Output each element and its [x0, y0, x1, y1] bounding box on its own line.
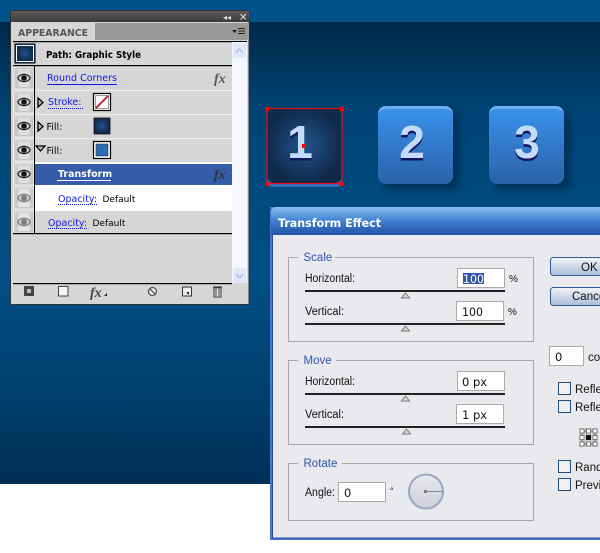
group: scale: Scale	[304, 252, 332, 264]
button 2: 2	[399, 116, 425, 168]
button 1: selected	[265, 107, 344, 187]
group: rotate: °	[390, 486, 394, 496]
icon: reference point locator	[579, 428, 598, 447]
dialog: transform effect	[270, 207, 600, 540]
button 2	[378, 106, 459, 190]
group: move: 0 px	[462, 375, 487, 389]
group: scale	[288, 252, 534, 342]
row: round corners: fx	[214, 72, 226, 87]
copies field	[550, 346, 600, 366]
row: opacity	[13, 211, 232, 234]
panel title bar	[11, 11, 249, 24]
dialog title bar: Transform Effect	[278, 216, 381, 230]
row: transform: Transform	[58, 169, 112, 180]
row: opacity: Default	[92, 219, 126, 229]
panel tab: APPEARANCE	[18, 28, 88, 39]
panel tab	[11, 23, 249, 41]
row: stroke: Stroke:	[48, 97, 81, 108]
panel: appearance	[10, 10, 249, 304]
button: ok	[550, 258, 600, 276]
row: transform: fx	[214, 168, 226, 183]
group: scale: Horizontal:	[305, 273, 355, 285]
row: fill blue: Fill:	[46, 146, 62, 157]
button: cancel	[550, 288, 600, 306]
button 1: selected: 1	[287, 116, 313, 168]
row: opacity nested: Default	[102, 195, 136, 205]
copies field: 0	[555, 350, 562, 364]
row: round corners: Round Corners	[47, 73, 117, 84]
row: opacity nested: Opacity:	[58, 194, 97, 205]
panel toolbar icons: fx	[90, 286, 102, 301]
group: rotate: 0	[344, 486, 351, 500]
button: ok: OK	[581, 262, 598, 274]
row: round corners	[14, 67, 232, 91]
group: scale: 100	[463, 272, 484, 286]
group: scale: %	[508, 307, 517, 318]
row: path graphic style	[13, 44, 232, 66]
group: scale: 100	[462, 305, 483, 319]
button 3: 3	[514, 118, 540, 170]
copies field: co	[588, 352, 600, 364]
row: opacity nested	[14, 185, 232, 211]
group: move: Horizontal:	[305, 376, 355, 388]
group: move: Vertical:	[305, 409, 344, 421]
group: scale: Vertical:	[305, 306, 344, 318]
group: rotate: Angle:	[305, 487, 335, 499]
panel title bar: ✕	[239, 12, 247, 24]
panel title bar: ◂◂	[223, 13, 231, 22]
group: move: 1 px	[462, 408, 487, 422]
group: scale: %	[509, 274, 518, 285]
checkboxes	[558, 382, 600, 492]
row: fill dark: Fill:	[46, 122, 62, 133]
button 3: 3	[514, 116, 540, 168]
row: fill dark	[14, 115, 232, 139]
row: transform	[14, 163, 232, 185]
row: opacity: Opacity:	[48, 218, 87, 229]
row: fill blue	[14, 139, 232, 164]
dialog title bar	[271, 207, 600, 235]
row: stroke	[14, 91, 232, 115]
button 1: selected: 1	[287, 118, 313, 170]
row: path graphic style: Path: Graphic Style	[46, 50, 141, 61]
scrollbar	[232, 42, 247, 283]
group: rotate	[288, 458, 534, 520]
button 2: 2	[399, 118, 425, 170]
group: rotate: Rotate	[304, 458, 337, 470]
panel toolbar icons	[13, 283, 232, 301]
group: move: Move	[304, 355, 332, 367]
group: move	[288, 355, 534, 444]
button 3	[489, 106, 570, 190]
